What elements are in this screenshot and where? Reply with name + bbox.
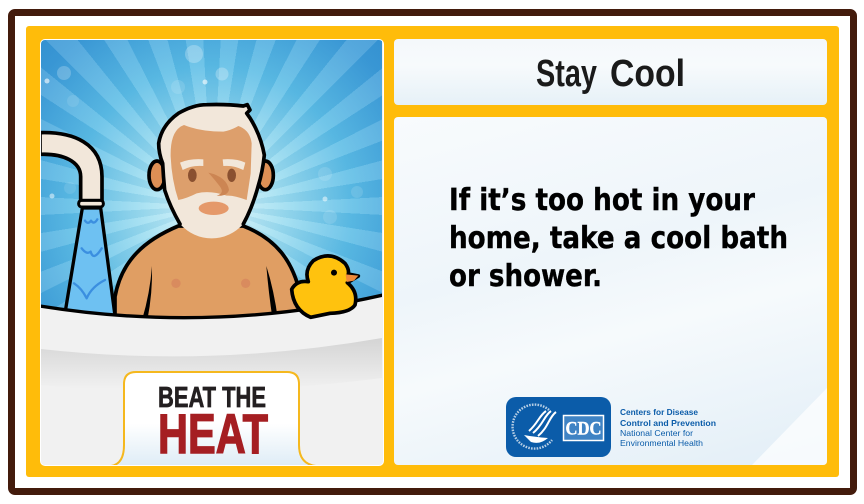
rubber duck [292, 256, 358, 317]
message text: or shower. [449, 259, 602, 294]
tub inner shadow [41, 338, 382, 374]
message text [449, 183, 788, 294]
badge: Beat the Heat [111, 372, 316, 466]
CDC organisation name: National Center for [620, 428, 693, 438]
panel: message background [394, 117, 827, 465]
illustration: man in bath [40, 45, 383, 466]
title: Cool [610, 53, 685, 95]
tub rim line [40, 295, 383, 318]
message text: If it’s too hot in your [449, 183, 755, 218]
ears [149, 161, 273, 190]
badge line 2: HEAT [158, 402, 268, 465]
title [536, 53, 685, 95]
CDC organisation name: Environmental Health [620, 438, 703, 448]
title: Stay [536, 53, 597, 95]
HHS seal [513, 405, 556, 449]
water stream [64, 208, 114, 314]
panel: illustration background [40, 39, 384, 466]
CDC organisation name: Centers for Disease [620, 407, 698, 417]
torso [114, 224, 298, 316]
message text: home, take a cool bath [449, 221, 788, 256]
badge line 1: BEAT THE [158, 382, 266, 414]
panel: title background [394, 39, 827, 105]
tub [41, 297, 382, 332]
head [159, 104, 264, 238]
bokeh bubbles [44, 45, 363, 224]
sunburst sky [41, 40, 382, 330]
CDC organisation name: Control and Prevention [620, 418, 716, 428]
CDC wordmark: CDC [566, 418, 602, 440]
faucet [40, 133, 103, 207]
figure group in magnified coordinates [40, 104, 301, 330]
CDC logo [506, 397, 716, 457]
CDC organisation name [620, 407, 716, 448]
corner shine [752, 388, 827, 465]
overlay drawing: illustration, text and logo [41, 45, 827, 465]
